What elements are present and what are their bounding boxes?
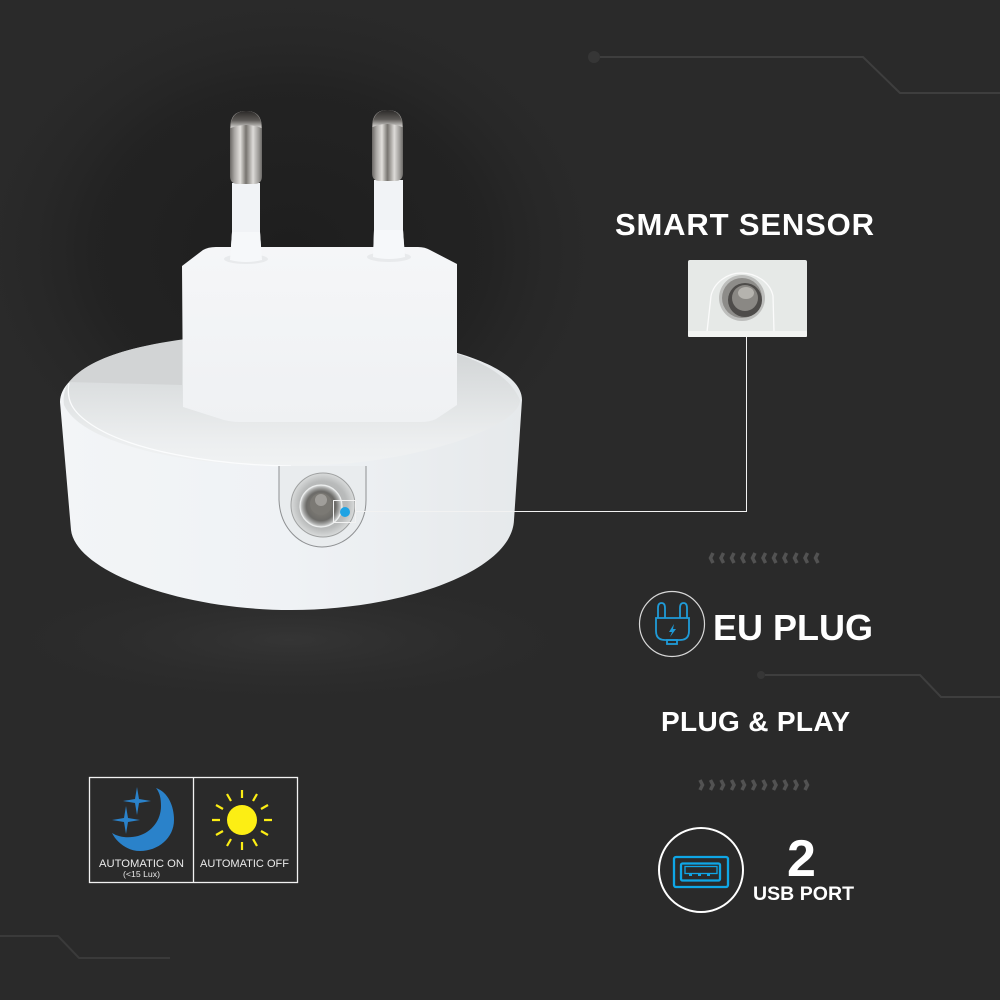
icon: moon and stars (112, 787, 174, 851)
heading: EU plug: EU PLUG (713, 607, 873, 648)
icon: EU plug (640, 592, 704, 656)
text: plug and play: PLUG & PLAY (661, 706, 850, 737)
chevron row: pointing left (710, 553, 818, 563)
plug pin: left (230, 111, 262, 262)
sensor housing and lens (279, 466, 366, 547)
label: automatic off: AUTOMATIC OFF (200, 858, 289, 870)
chevron row: pointing right (700, 780, 808, 790)
heading: smart sensor: SMART SENSOR (615, 207, 874, 242)
callout connector from sensor to thumbnail (334, 337, 746, 522)
label: USB port: USB PORT (753, 883, 854, 905)
label: automatic on: AUTOMATIC ON (99, 858, 184, 870)
product: white round night light with EU plug (60, 110, 522, 610)
label: lux threshold: (<15 Lux) (123, 870, 160, 879)
decorative circuit line: bottom left (0, 936, 170, 958)
sensor close-up thumbnail (688, 260, 807, 337)
icon: sun (212, 790, 272, 850)
plug block (182, 230, 457, 422)
number: 2: 2 (787, 830, 816, 888)
decorative circuit line: middle right (757, 671, 1000, 697)
callout marker: blue dot (340, 507, 350, 517)
icon: USB port (659, 828, 743, 912)
plug pin: right (372, 110, 405, 260)
round base (60, 333, 522, 610)
decorative circuit line: top right (588, 51, 1000, 93)
panel: automatic on / off (90, 777, 298, 883)
